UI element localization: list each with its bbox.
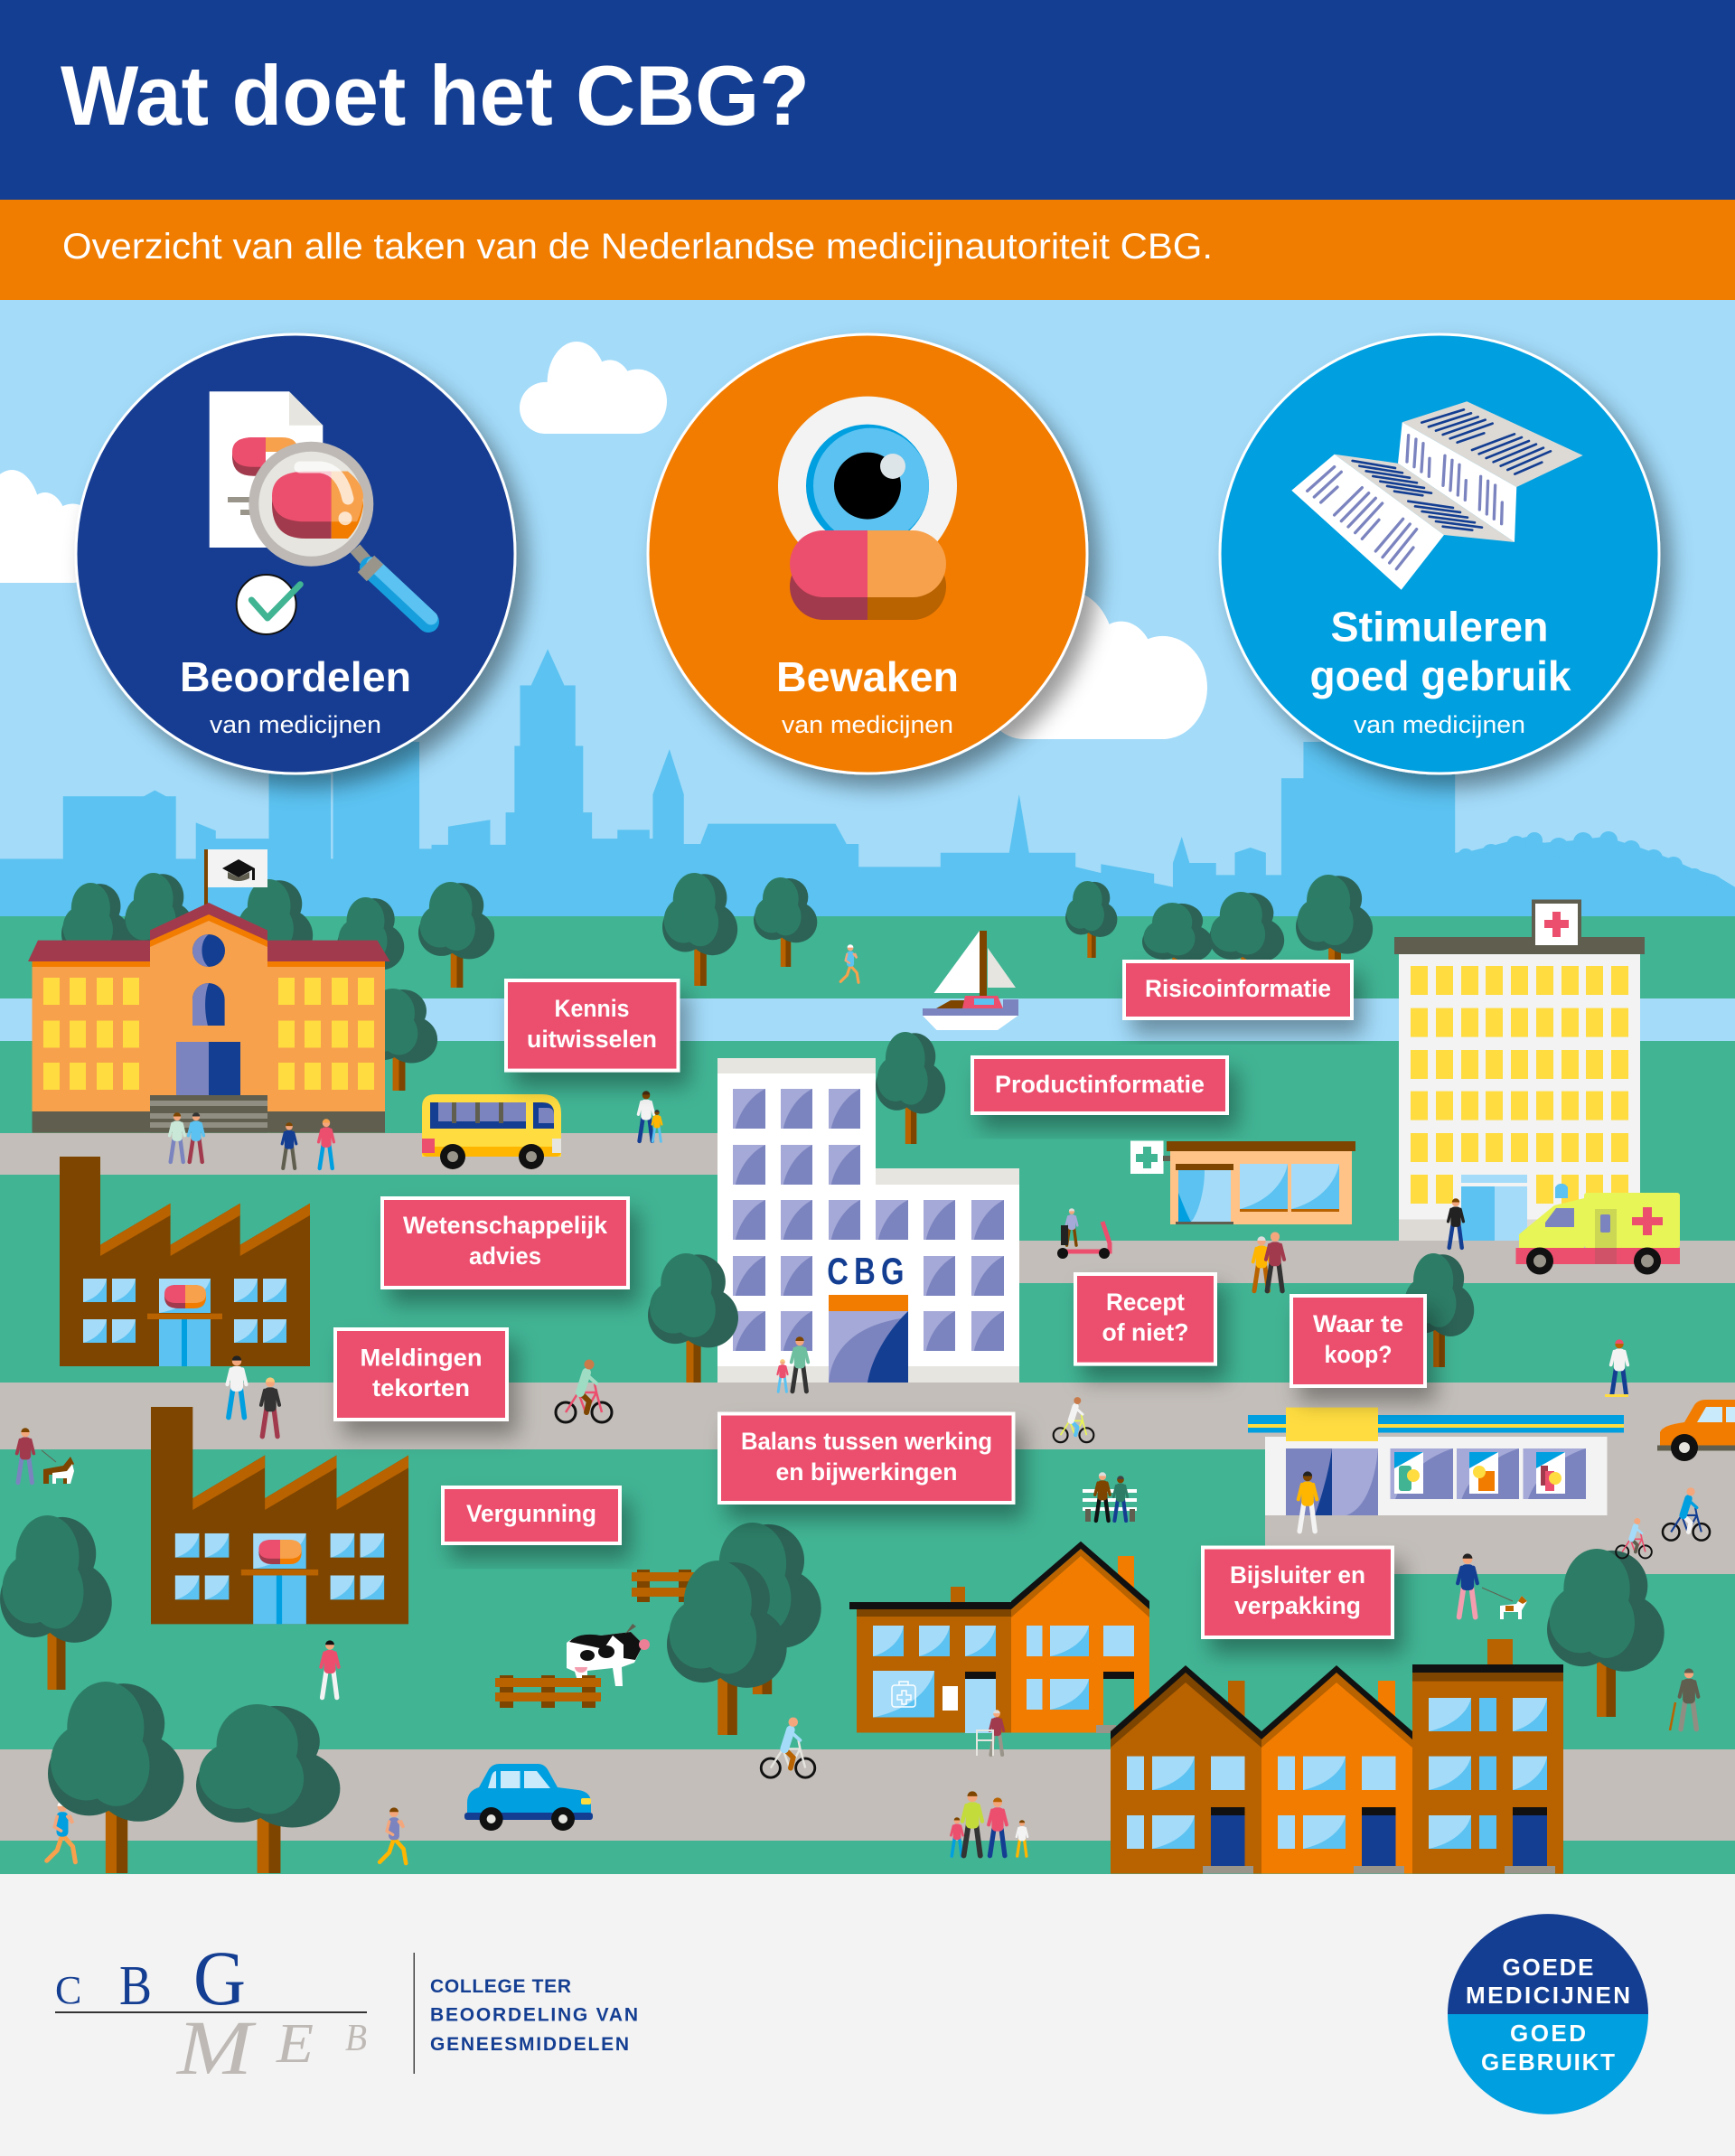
- orange car: [1657, 1400, 1735, 1461]
- logo: CBG MEB: C: [55, 1968, 81, 2012]
- walking frame: [977, 1730, 993, 1756]
- road network: [0, 1133, 1735, 1841]
- label: Risicoinformatie: [1122, 960, 1354, 1020]
- treeline silhouette on skyline: [1458, 831, 1722, 892]
- logo divider and name: BEOORDELING VAN: [430, 2005, 638, 2026]
- school bus: [422, 1094, 561, 1169]
- label: Recept of niet?: [1074, 1272, 1217, 1366]
- tree R: [196, 1704, 340, 1873]
- badge: Goede medicijnen goed gebruikt: GEBRUIKT: [1481, 2048, 1615, 2076]
- dogs left: [42, 1450, 74, 1484]
- logo: CBG MEB: M: [175, 2004, 257, 2091]
- logo: CBG MEB: [55, 1935, 367, 2091]
- shop: [1248, 1408, 1624, 1515]
- grass: [0, 916, 1735, 1874]
- blue car: [464, 1764, 593, 1831]
- label: Vergunning: Vergunning: [466, 1500, 596, 1527]
- tree Q: [48, 1682, 183, 1873]
- label: Meldingen tekorten: Meldingen: [360, 1345, 483, 1372]
- panel: Bewaken: Bewaken: [776, 653, 959, 700]
- CBG head office: CBG: [827, 1250, 910, 1292]
- subtitle: Overzicht van alle taken van de Nederlandse medicijnautoriteit CBG.: [62, 227, 1213, 267]
- badge: Goede medicijnen goed gebruikt: [1448, 1914, 1648, 2114]
- hospital: [1394, 900, 1645, 1241]
- label: Kennis uitwisselen: uitwisselen: [527, 1026, 657, 1053]
- header band: [0, 0, 1735, 200]
- label: Bijsluiter en verpakking: [1201, 1545, 1394, 1639]
- fence back: [632, 1570, 702, 1602]
- label: Waar te koop?: [1290, 1294, 1427, 1388]
- label: Wetenschappelijk advies: [380, 1196, 630, 1289]
- mobility scooter: [1057, 1208, 1110, 1259]
- label: Waar te koop?: Waar te: [1313, 1310, 1403, 1337]
- trees along the river: [418, 873, 1373, 1144]
- logo divider and name: [414, 1953, 638, 2074]
- label: Productinformatie: Productinformatie: [995, 1071, 1205, 1098]
- footer background: [0, 1874, 1735, 2156]
- city skyline: [0, 649, 1735, 919]
- cyclists: [556, 1359, 1710, 1777]
- panel: Beoordelen: Beoordelen: [180, 653, 411, 700]
- tree right: [1547, 1549, 1665, 1717]
- cow: [567, 1624, 650, 1686]
- sailing boat: [923, 931, 1018, 1030]
- CBG head office: [717, 1058, 1019, 1383]
- icon: document with magnifier and check: [210, 391, 431, 634]
- badge: Goede medicijnen goed gebruikt: MEDICIJNEN: [1466, 1982, 1630, 2009]
- label: Balans tussen werking en bijwerkingen: [717, 1411, 1016, 1505]
- icon: eye on pill: [778, 397, 957, 620]
- trees behind the school: [61, 873, 437, 1091]
- panel: Bewaken: van medicijnen: [782, 711, 953, 738]
- cloud left: [0, 470, 102, 583]
- label: Risicoinformatie: Risicoinformatie: [1145, 975, 1331, 1002]
- walking cane: [1670, 1702, 1675, 1730]
- label: Kennis uitwisselen: [504, 979, 680, 1073]
- front row of houses: [1111, 1639, 1563, 1874]
- label: Wetenschappelijk advies: Wetenschappelijk: [403, 1212, 608, 1239]
- logo divider and name: GENEESMIDDELEN: [430, 2034, 629, 2055]
- label: Productinformatie: [971, 1055, 1229, 1115]
- panel: Stimuleren goed gebruik: goed gebruik: [1310, 652, 1571, 699]
- label: Recept of niet?: of niet?: [1102, 1319, 1189, 1346]
- panel: Stimuleren goed gebruik: van medicijnen: [1354, 711, 1525, 738]
- tree by CBG office: [648, 1253, 738, 1383]
- badge: Goede medicijnen goed gebruikt: GOEDE: [1502, 1954, 1594, 1981]
- label: Wetenschappelijk advies: advies: [469, 1242, 541, 1270]
- label: Balans tussen werking en bijwerkingen: en bijwerkingen: [775, 1458, 958, 1486]
- cloud right: [985, 592, 1207, 739]
- dog right: [1482, 1588, 1527, 1619]
- label: Balans tussen werking en bijwerkingen: Balans tussen werking: [741, 1428, 992, 1455]
- logo: CBG MEB: G: [193, 1935, 246, 2021]
- panel: Bewaken: [648, 334, 1087, 773]
- pharmacy: [1130, 1140, 1355, 1224]
- subtitle band: [0, 200, 1735, 300]
- trees by the meadow: [0, 1515, 821, 1735]
- factory bottom: [151, 1407, 408, 1624]
- label: Meldingen tekorten: tekorten: [372, 1374, 470, 1401]
- logo divider and name: COLLEGE TER: [430, 1976, 571, 1997]
- label: Recept of niet?: Recept: [1106, 1289, 1185, 1316]
- panel: Stimuleren goed gebruik: [1220, 334, 1659, 773]
- sky: [0, 300, 1735, 933]
- panel: Beoordelen: van medicijnen: [210, 711, 381, 738]
- panel: Stimuleren goed gebruik: Stimuleren: [1330, 604, 1549, 651]
- logo: CBG MEB: B: [345, 2018, 367, 2059]
- label: Bijsluiter en verpakking: verpakking: [1234, 1592, 1361, 1619]
- label: Meldingen tekorten: [333, 1327, 509, 1421]
- skateboard: [1605, 1394, 1628, 1397]
- logo: CBG MEB: E: [276, 2013, 314, 2075]
- ambulance: [1516, 1184, 1680, 1274]
- row of brown and orange houses back: [849, 1542, 1149, 1733]
- badge: Goede medicijnen goed gebruikt: GOED: [1510, 2020, 1586, 2047]
- panel: Beoordelen: [76, 334, 515, 773]
- two men on a bench: [1083, 1472, 1137, 1522]
- label: Kennis uitwisselen: Kennis: [555, 995, 629, 1022]
- title: Wat doet het CBG?: [61, 48, 810, 143]
- people walking: [17, 1091, 1698, 1856]
- label: Bijsluiter en verpakking: Bijsluiter en: [1230, 1561, 1365, 1589]
- label: Waar te koop?: koop?: [1325, 1341, 1392, 1368]
- logo: CBG MEB: B: [119, 1955, 152, 2017]
- cloud top: [520, 342, 667, 434]
- fence front: [495, 1675, 601, 1708]
- university building: [28, 849, 390, 1133]
- tree near shop: [1403, 1253, 1474, 1367]
- runners: [47, 944, 858, 1863]
- icon: folded leaflet: [1291, 401, 1583, 590]
- label: Vergunning: [441, 1486, 622, 1545]
- factory top: [60, 1157, 310, 1366]
- river: [0, 998, 1735, 1041]
